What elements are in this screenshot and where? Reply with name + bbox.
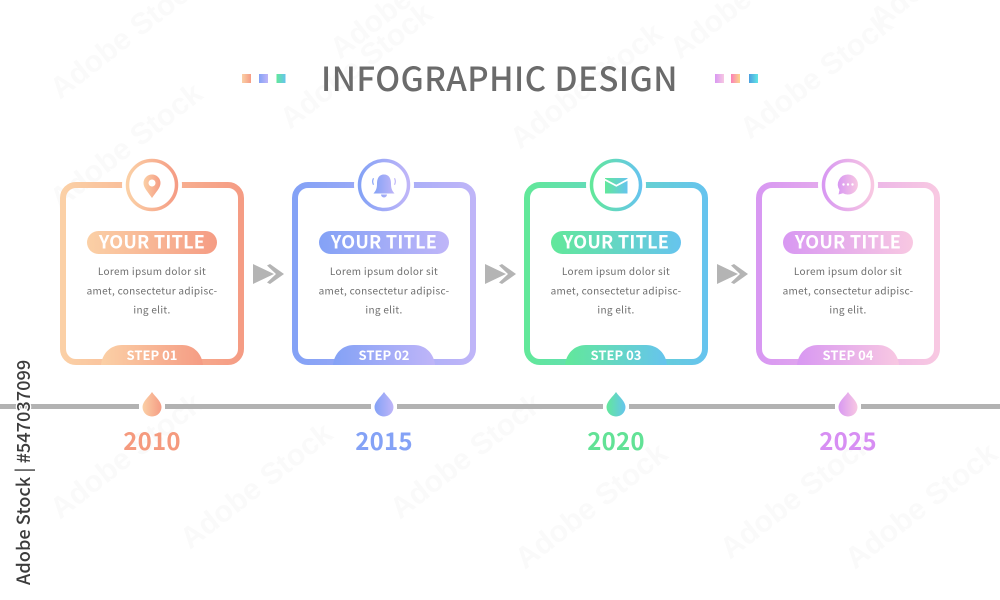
watermark pattern: Adobe Stock [839, 436, 1000, 576]
body text [87, 263, 218, 316]
step tab: STEP 04 [823, 345, 874, 364]
step tab: STEP 01 [127, 345, 177, 364]
decorative squares right of title [715, 74, 758, 83]
icon ring [122, 155, 182, 215]
step tab: STEP 03 [591, 345, 641, 364]
watermark pattern: Adobe Stock [509, 436, 674, 576]
arrow 2 [485, 264, 516, 284]
watermark pattern: Adobe Stock [44, 76, 209, 216]
step tab [797, 345, 899, 365]
icon: bell [372, 174, 396, 198]
watermark pattern: Adobe Stock [504, 16, 669, 156]
body text: ing elit. [133, 302, 171, 316]
watermark pattern: Adobe Stock [174, 416, 339, 556]
arrow 1 [253, 264, 284, 284]
step tab: STEP 02 [359, 345, 409, 364]
watermark pattern: Adobe Stock [44, 386, 209, 526]
body text: amet, consectetur adipisc- [319, 282, 450, 298]
body text: amet, consectetur adipisc- [783, 282, 914, 298]
icon ring [586, 155, 646, 215]
arrow 3 [717, 264, 748, 284]
title pill: YOUR TITLE [794, 228, 901, 254]
title: INFOGRAPHIC DESIGN [321, 53, 678, 101]
body text: Lorem ipsum dolor sit [794, 263, 902, 278]
icon: location pin [144, 174, 160, 198]
timeline marker 2025 [835, 392, 861, 416]
body text: ing elit. [597, 302, 635, 316]
body text: amet, consectetur adipisc- [87, 282, 218, 298]
watermark pattern: Adobe Stock [274, 0, 439, 136]
year 2020: 2020 [587, 422, 645, 457]
year 2010: 2010 [123, 422, 181, 457]
step tab [333, 345, 435, 365]
step tab [101, 345, 203, 365]
body text [783, 263, 914, 316]
card frame [295, 185, 473, 362]
title pill: YOUR TITLE [562, 228, 669, 254]
watermark pattern: Adobe Stock [384, 386, 549, 526]
timeline marker 2015 [371, 392, 397, 416]
vertical stock credit: Adobe Stock | #547037099 [10, 360, 36, 585]
icon ring [354, 155, 414, 215]
timeline marker 2020 [603, 392, 629, 416]
body text [319, 263, 450, 316]
panel: step 04 [759, 155, 937, 365]
title pill: YOUR TITLE [330, 228, 437, 254]
body text: Lorem ipsum dolor sit [330, 263, 438, 278]
timeline line [0, 404, 1000, 409]
card frame [63, 185, 241, 362]
timeline marker 2010 [139, 392, 165, 416]
panel: step 01 [63, 155, 241, 365]
panel: step 02 [295, 155, 473, 365]
step tab [565, 345, 667, 365]
card frame [759, 185, 937, 362]
icon: speech bubble [838, 174, 858, 194]
title pill: YOUR TITLE [98, 228, 205, 254]
watermark pattern: Adobe Stock [734, 6, 899, 146]
body text: Lorem ipsum dolor sit [562, 263, 670, 278]
year 2025: 2025 [819, 422, 877, 457]
icon: envelope [605, 178, 628, 194]
icon ring [818, 155, 878, 215]
decorative squares left of title [242, 74, 286, 83]
body text: ing elit. [829, 302, 867, 316]
year 2015: 2015 [355, 422, 413, 457]
body text: ing elit. [365, 302, 403, 316]
card frame [527, 185, 705, 362]
watermark pattern: Adobe Stock [714, 426, 879, 566]
panel: step 03 [527, 155, 705, 365]
body text: Lorem ipsum dolor sit [98, 263, 206, 278]
body text [551, 263, 682, 316]
body text: amet, consectetur adipisc- [551, 282, 682, 298]
